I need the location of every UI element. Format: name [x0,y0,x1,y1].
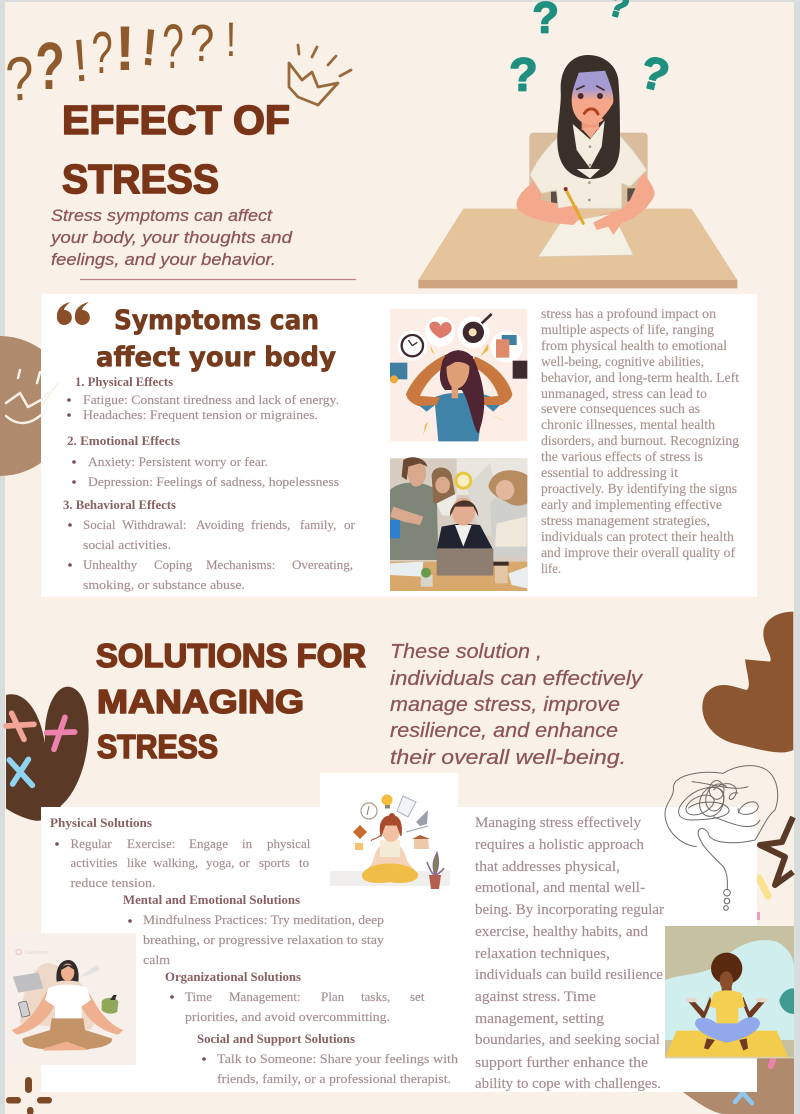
text block: effects list: family, [300,517,336,532]
text block: stress impact: stress has a profound impact on [541,306,716,321]
doodle: question and exclamation marks: ! [226,14,236,67]
text block: solutions list: Regular [70,836,112,851]
text block: solutions list [50,815,459,1086]
text block: solutions list: friends, family, or a professional therapist. [217,1071,451,1086]
text block: managing stress: against stress. Time [475,989,596,1005]
text block: managing stress [475,815,664,1092]
doodle: question and exclamation marks: ! [70,27,91,95]
doodle: question and exclamation marks: ! [140,18,159,78]
text block: managing stress: relaxation techniques, [475,946,610,962]
intro text [50,206,293,269]
text block: managing stress: support further enhance the [475,1055,648,1071]
text block: stress impact: and improve their overall quality of [541,545,735,560]
text block: effects list: Coping [154,557,193,572]
text block: managing stress: that addresses physical, [475,859,620,875]
text block: solutions list: Engage [189,836,228,851]
text block: solutions list: Talk to Someone: Share your feelings with [217,1051,459,1066]
image: meditating woman with laptop and mug [6,933,136,1065]
intro text: your body, your thoughts and [50,228,293,247]
decoration: sparkle dashes [6,1077,52,1114]
image: meditating woman with laptop and mug: Calmerry [25,950,48,956]
title: EFFECT OF [62,97,290,143]
text block: managing stress: requires a holistic approach [475,837,645,853]
panel: solutions [41,773,757,1092]
text block: effects list: Anxiety: Persistent worry or fear. [88,454,268,469]
icon: teal question marks: ? [635,46,674,102]
text block: stress impact: severe consequences such as [541,401,700,416]
decoration: bottom right blob [683,1058,794,1114]
intro text: feelings, and your behavior. [51,250,276,269]
icon: crown doodle [289,45,351,105]
doodle: thought bubble dots [724,898,730,910]
text block: effects list: friends, [251,517,290,532]
heading: symptoms: Symptoms can [114,305,319,336]
text block: stress impact: stress management strategies, [541,513,710,528]
image: meditating woman in yellow shirt [665,926,794,1058]
text block: solutions list: Physical Solutions [50,815,152,830]
text block: solutions list: tasks, [361,989,390,1004]
text block: solutions list: Time [185,989,212,1004]
intro text: solutions: resilience, and enhance [390,720,618,742]
text block: solutions list: set [410,989,425,1004]
text block: stress impact: the various effects of stress is [541,449,703,464]
text block: solutions list: Organizational Solutions [165,969,301,984]
text block: stress impact: essential to addressing it [541,465,678,480]
text block: solutions list: in [242,836,253,851]
text block: stress impact: well-being, cognitive abilities, [541,354,704,369]
text block: effects list [63,374,356,592]
text block: managing stress: emotional, and mental well- [475,880,645,896]
text block: stress impact: unmanaged, stress can lead to [541,386,707,401]
text block: solutions list: like [127,855,147,870]
text block: effects list: Headaches: Frequent tension or migraines. [83,407,318,422]
icon: teal question marks: ? [509,49,538,101]
text block: effects list: 2. Emotional Effects [67,433,180,448]
illustration: stressed woman at desk [418,0,737,288]
heading: symptoms: affect your body [96,342,336,373]
doodle: question and exclamation marks: ? [190,15,214,73]
text block: effects list: smoking, or substance abuse. [83,577,245,592]
text block: effects list: Mechanisms: [206,557,275,572]
text block: solutions list: or [239,855,250,870]
doodle: question and exclamation marks: ? [91,20,113,86]
intro text: solutions: their overall well-being. [390,747,626,769]
text block: effects list: 3. Behavioral Effects [63,497,176,512]
title [62,97,290,202]
text block: solutions list: Exercise: [127,836,175,851]
image: woman holding head surrounded by worries [390,309,527,441]
text block: effects list: Avoiding [196,517,245,532]
text block: solutions list: Social and Support Solutions [197,1031,355,1046]
text block: solutions list: Management: [229,989,300,1004]
text block: solutions list: walking, [153,855,198,870]
doodle: question and exclamation marks: ? [35,29,65,104]
text block: solutions list: priorities, and avoid overcommitting. [185,1009,390,1024]
text block: solutions list: breathing, or progressive relaxation to stay [143,932,385,947]
text block: effects list: Social [83,517,116,532]
text block: solutions list: Plan [321,989,345,1004]
icon: teal question marks [509,0,674,102]
text block: effects list: Overeating, [292,557,353,572]
text block: effects list: Depression: Feelings of sadness, hopelessness [88,474,339,489]
image: colleagues crowding stressed worker [390,457,527,591]
text block: solutions list: Mindfulness Practices: Try meditation, deep [143,912,384,927]
text block: managing stress: boundaries, and seeking social [475,1032,660,1048]
text block: solutions list: calm [143,952,170,967]
image: meditating woman with floating icons [330,794,450,889]
heading: solutions: SOLUTIONS FOR [96,637,366,674]
text block: managing stress: ability to cope with challenges. [475,1076,661,1092]
heading: solutions: STRESS [97,728,218,765]
text block: effects list: Unhealthy [83,557,138,572]
text block: stress impact: multiple aspects of life, ranging [541,322,714,337]
text block: solutions list: physical [267,836,311,851]
text block: solutions list: Mental and Emotional Solutions [123,892,300,907]
text block: effects list: Fatigue: Constant tiredness and lack of energy. [83,392,339,407]
text block: effects list: 1. Physical Effects [75,374,173,389]
text block: stress impact: proactively. By identifying the signs [541,481,737,496]
decoration: star and yellow stroke [757,817,793,920]
text block: managing stress: individuals can build resilience [475,967,663,983]
text block: solutions list: yoga, [206,855,235,870]
text block: effects list: social activities. [83,537,171,552]
decoration: brown blob [702,612,793,752]
text block: managing stress: exercise, healthy habits, and [475,924,649,940]
decoration: heart with crosses [6,687,89,821]
intro text: solutions: These solution , [390,641,542,663]
text block: managing stress: management, setting [475,1011,604,1027]
text block: solutions list: activities [70,855,117,870]
intro text: solutions: manage stress, improve [390,694,620,716]
text block: stress impact: from physical health to emotional [541,338,727,353]
heading: symptoms [96,305,336,373]
text block: stress impact: chronic illnesses, mental health [541,417,715,432]
doodle: question and exclamation marks: ! [115,14,135,84]
doodle: question and exclamation marks [4,13,236,115]
text block: stress impact: disorders, and burnout. Recognizing [541,433,739,448]
text block: solutions list: sports [259,855,290,870]
doodle: tangled thought scribble [665,766,778,896]
text block: managing stress: being. By incorporating regular [475,902,664,918]
text block: stress impact: life. [541,561,561,576]
intro text: solutions [390,641,643,769]
icon: quote marks [57,302,90,325]
text block: effects list: or [344,517,356,532]
text block: stress impact: early and implementing effective [541,497,722,512]
title: STRESS [62,156,219,202]
text block: managing stress: Managing stress effectively [475,815,642,831]
text block: stress impact: behavior, and long-term health. Left [541,370,739,385]
doodle: question and exclamation marks: ? [162,13,184,82]
intro text: solutions: individuals can effectively [390,668,643,690]
doodle: question and exclamation marks: ? [4,44,36,115]
text block: effects list: Withdrawal: [122,517,186,532]
heading: solutions [96,637,366,765]
text block: solutions list: to [299,855,309,870]
text block: stress impact: individuals can protect their health [541,529,734,544]
text block: solutions list: reduce tension. [70,875,156,890]
heading: solutions: MANAGING [97,683,304,720]
panel: symptoms [41,294,757,597]
intro text: Stress symptoms can affect [51,206,273,225]
text block: stress impact [541,306,739,576]
decoration: smiley blob [0,336,70,476]
